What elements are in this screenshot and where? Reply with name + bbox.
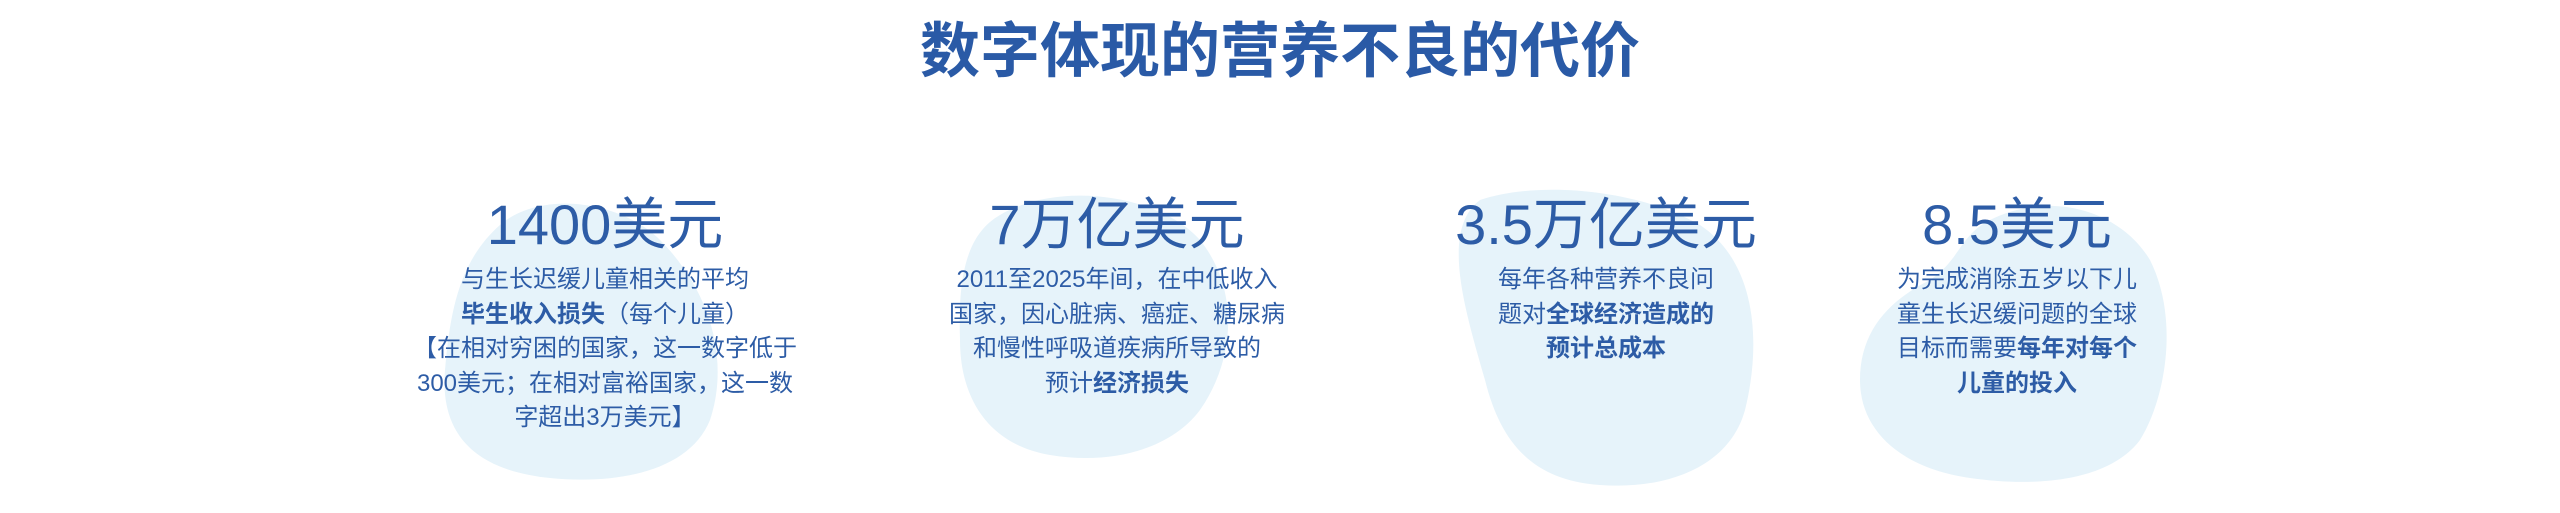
stat 1: 与生长迟缓儿童相关的平均 (461, 266, 749, 293)
stat 1: 【在相对穷困的国家，这一数字低于 (413, 335, 797, 362)
blob 2 (960, 196, 1228, 458)
stat 2: 国家，因心脏病、癌症、糖尿病 (949, 300, 1285, 328)
stat 3: 3.5万亿美元 (1455, 193, 1757, 256)
stat 1: 字超出3万美元】 (514, 404, 696, 431)
blob 1 (444, 204, 718, 480)
stat 4: 儿童的投入 (1957, 370, 2077, 396)
stat 1 (413, 193, 797, 431)
stat 3: 预计总成本 (1546, 335, 1666, 362)
stat 2: 预计经济损失 (1045, 370, 1189, 396)
stat 2 (949, 193, 1285, 396)
stat 4: 8.5美元 (1922, 193, 2112, 256)
stat 4 (1897, 193, 2137, 396)
stat 2: 2011至2025年间，在中低收入 (956, 266, 1278, 293)
stat 3: 每年各种营养不良问 (1498, 266, 1714, 293)
stat 1: 毕生收入损失（每个儿童） (461, 300, 749, 328)
blob 3 (1459, 190, 1753, 486)
stat 4: 童生长迟缓问题的全球 (1897, 300, 2137, 328)
stat 3: 题对全球经济造成的 (1498, 300, 1714, 328)
stat 4: 为完成消除五岁以下儿 (1897, 266, 2137, 293)
stat 1: 300美元；在相对富裕国家，这一数 (417, 370, 793, 396)
stat 2: 和慢性呼吸道疾病所导致的 (973, 335, 1261, 362)
stat 4: 目标而需要每年对每个 (1897, 335, 2137, 362)
title: 数字体现的营养不良的代价 (920, 18, 1640, 85)
blob 4 (1860, 206, 2167, 482)
stat 3 (1455, 193, 1757, 362)
stat 1: 1400美元 (487, 193, 723, 256)
stat 2: 7万亿美元 (989, 193, 1245, 256)
